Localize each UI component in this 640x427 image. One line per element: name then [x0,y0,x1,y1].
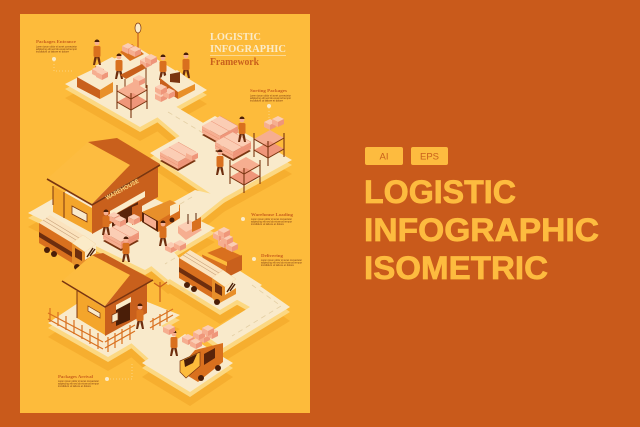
label: packages entrance: Lorem ipsum dolor sit amet consectetur [36,44,77,48]
label: sorting packages [250,88,291,118]
isometric ground platforms [28,47,292,406]
forklift and boxes [178,213,202,240]
poster title [210,31,286,68]
label: sorting packages: Sorting Packages [250,88,287,93]
truck: warehouse left [39,215,96,270]
label: packages arrival: incididunt ut labore et dolore [58,384,92,388]
main heading: INFOGRAPHIC [364,212,599,248]
label: sorting packages: incididunt ut labore et dolore [250,98,284,102]
label: sorting packages: Lorem ipsum dolor sit amet consectetur [250,94,291,98]
delivering forklift and boxes [202,227,242,278]
van: arrival with boxes [180,325,223,382]
label: delivering [252,253,302,267]
label: packages entrance: Packages Entrance [36,39,76,44]
main heading: LOGISTIC [364,174,516,210]
van: loading [132,200,180,232]
label: sorting packages: adipiscing elit sed do eiusmod tempor [250,96,291,100]
label: packages arrival: adipiscing elit sed do eiusmod tempor [58,382,99,386]
label: packages arrival [58,363,132,388]
label: warehouse loading: Warehouse Loading [251,212,294,217]
label: warehouse loading [241,212,294,226]
poster title: Framework [210,57,259,68]
badge: AI: AI [380,152,388,162]
icon: scale post [135,23,141,56]
main heading: ISOMETRIC [364,250,548,286]
label: delivering: incididunt ut labore et dolore [261,263,295,267]
fence [48,282,173,352]
label: warehouse loading: adipiscing elit sed do eiusmod tempor [251,220,292,224]
counter right [155,70,195,102]
label: warehouse loading: Lorem ipsum dolor sit amet consectetur [251,217,292,221]
truck: delivering [179,250,236,305]
scene: packing station [77,23,195,118]
poster title: INFOGRAPHIC [210,43,286,55]
label: delivering: Lorem ipsum dolor sit amet consectetur [261,258,302,262]
warehouse building [47,138,160,234]
label: delivering: Delivering [261,253,284,258]
label: packages arrival: Lorem ipsum dolor sit amet consectetur [58,379,99,383]
panel: poster [20,14,310,413]
label: packages arrival: Packages Arrival [58,374,94,379]
warehouse sign: WAREHOUSE [105,179,140,202]
scene: warehouse loading [102,210,202,262]
label: packages entrance: adipiscing elit sed do eiusmod tempor [36,47,77,51]
label: warehouse loading: incididunt ut labore et dolore [251,222,285,226]
arrival house [62,253,153,336]
people at arrival [136,304,178,356]
packing table and boxes [92,43,157,80]
main heading [364,174,599,286]
label: delivering: adipiscing elit sed do eiusmod tempor [261,260,302,264]
label: packages entrance [36,39,77,71]
format badges [365,147,448,165]
label: packages entrance: incididunt ut labore et dolore [36,50,70,54]
people [93,40,190,80]
counter left [77,66,113,99]
table and shelf [117,64,147,118]
scene: sorting packages [160,116,284,193]
badge: EPS: EPS [420,152,439,162]
poster title: LOGISTIC [210,31,261,43]
